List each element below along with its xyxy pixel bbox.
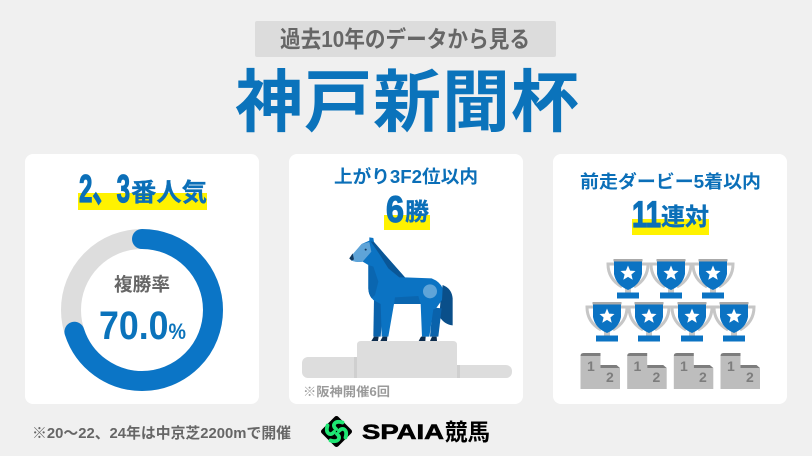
- panel heading: 前走ダービー5着以内: [580, 171, 761, 192]
- panel heading: [79, 168, 207, 211]
- panel heading: 上がり3F2位以内: [334, 166, 478, 187]
- footnote: Hanshin: ※阪神開催6回: [303, 384, 390, 399]
- donut value: 70.0%: [99, 304, 186, 348]
- highlight: [632, 219, 709, 235]
- panel: popularity: [25, 154, 259, 404]
- panel value: 連対: [661, 204, 709, 231]
- panel value: [386, 189, 429, 230]
- subtitle banner: 過去10年のデータから見る: [280, 26, 530, 52]
- donut chart: 70.0%: [71, 239, 213, 381]
- panel value: 6: [386, 189, 404, 230]
- logo text: 競馬: [445, 419, 490, 445]
- logo mark: [324, 418, 350, 444]
- donut label: 複勝率: [114, 274, 170, 295]
- panel heading: 番人気: [131, 179, 207, 207]
- podiums: 1: [727, 358, 735, 374]
- trophies: [587, 259, 754, 342]
- panel: previous race: [553, 154, 787, 404]
- panel heading: 2、3: [79, 168, 130, 211]
- podium: [302, 341, 512, 378]
- podiums: 2: [606, 369, 614, 385]
- podiums: 1: [587, 358, 595, 374]
- panel value: [632, 194, 709, 235]
- podiums: 1: [634, 358, 642, 374]
- panel value: 勝: [405, 199, 429, 226]
- podiums: 2: [699, 369, 707, 385]
- logo text: [362, 419, 490, 445]
- podiums: 1: [680, 358, 688, 374]
- icon: horse: [349, 237, 453, 341]
- footnote: ※20〜22、24年は中京芝2200mで開催: [32, 424, 291, 442]
- highlight: [78, 193, 207, 210]
- podiums: 2: [746, 369, 754, 385]
- logo: SPAIA: [324, 418, 490, 445]
- podiums: 2: [652, 369, 660, 385]
- panel: last 3F: [289, 154, 523, 404]
- title: 神戸新聞杯: [235, 65, 579, 141]
- panel value: 11: [632, 194, 661, 235]
- highlight: [384, 215, 430, 230]
- logo text: SPAIA: [362, 421, 444, 444]
- podiums: [580, 353, 760, 389]
- subtitle banner: [255, 21, 556, 57]
